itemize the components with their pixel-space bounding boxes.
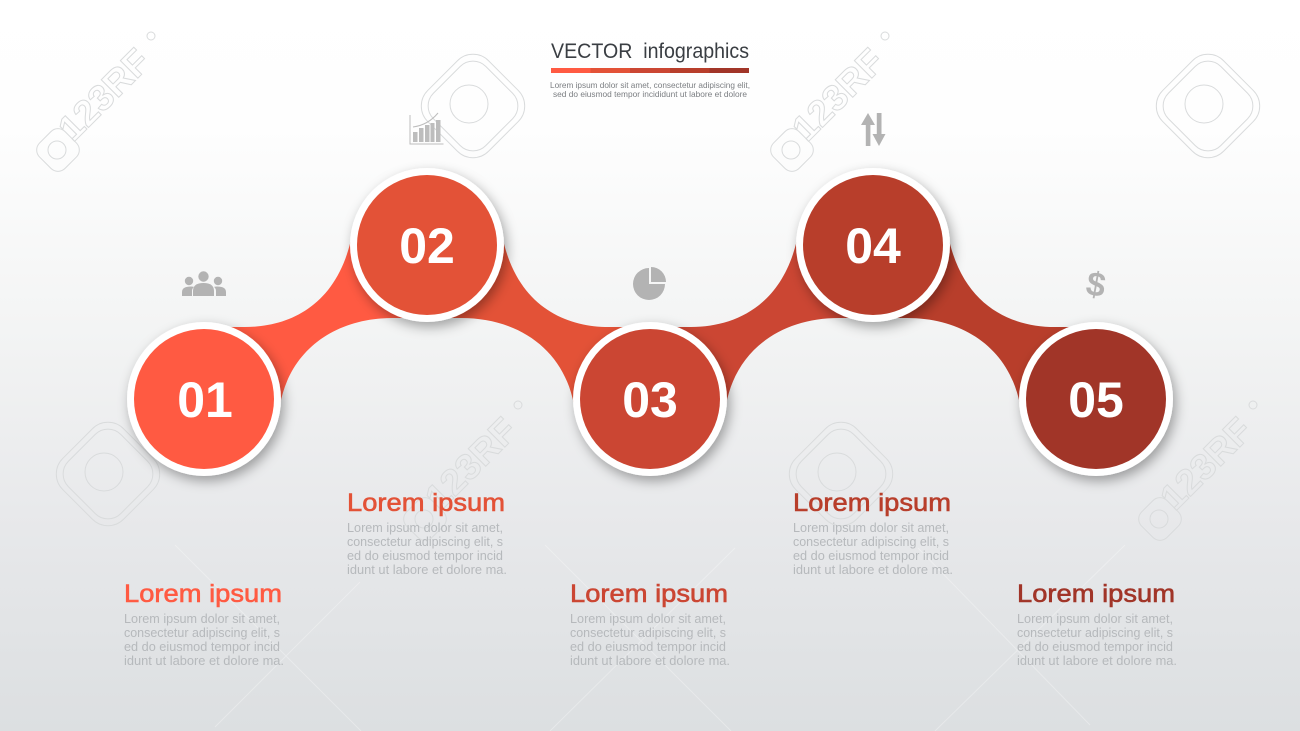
title description: Lorem ipsum dolor sit amet, consectetur adipiscing elit, — [550, 80, 750, 90]
text block 03: Lorem ipsum — [570, 580, 728, 608]
text block 04: idunt ut labore et dolore ma. — [793, 563, 953, 577]
text block 03: consectetur adipiscing elit, s — [570, 626, 726, 640]
text block 01 — [124, 580, 284, 668]
text block 02: idunt ut labore et dolore ma. — [347, 563, 507, 577]
text block 04: ed do eiusmod tempor incid — [793, 549, 949, 563]
ribbon segment 1 to 2 — [204, 235, 427, 405]
text block 01: ed do eiusmod tempor incid — [124, 640, 280, 654]
step 01 circle: 01 — [177, 372, 233, 428]
ribbon segment 2 to 3 — [427, 235, 650, 405]
text block 03 — [570, 580, 730, 668]
watermarks: 123RF — [50, 40, 158, 149]
text block 03: idunt ut labore et dolore ma. — [570, 654, 730, 668]
text block 05: idunt ut labore et dolore ma. — [1017, 654, 1177, 668]
text block 04 — [793, 489, 953, 577]
step 05 circle: 05 — [1068, 372, 1124, 428]
step 02 circle — [350, 168, 504, 322]
text block 01: consectetur adipiscing elit, s — [124, 626, 280, 640]
step 02 circle: 02 — [399, 218, 455, 274]
text block 05 — [1017, 580, 1177, 668]
text block 05: Lorem ipsum — [1017, 580, 1175, 608]
step 03 circle: 03 — [622, 372, 678, 428]
text block 03: ed do eiusmod tempor incid — [570, 640, 726, 654]
step 04 circle — [796, 168, 950, 322]
title gradient bar — [551, 68, 749, 73]
text block 03: Lorem ipsum dolor sit amet, — [570, 612, 726, 626]
title description — [550, 80, 750, 99]
icon: dollar: $ — [1083, 265, 1109, 305]
ribbon segment 3 to 4 — [650, 235, 873, 405]
icon: bar chart — [410, 113, 444, 144]
title block — [550, 40, 750, 99]
text block 02 — [347, 489, 507, 577]
wave ribbon — [204, 235, 1096, 405]
text block 05: Lorem ipsum dolor sit amet, — [1017, 612, 1173, 626]
step 01 circle — [127, 322, 281, 476]
text block 04: consectetur adipiscing elit, s — [793, 535, 949, 549]
watermarks: 123RF — [417, 409, 525, 518]
icon: pie chart — [633, 267, 666, 300]
watermarks: 123RF — [784, 40, 892, 149]
text block 01: Lorem ipsum dolor sit amet, — [124, 612, 280, 626]
icon: up and down arrows — [861, 113, 886, 146]
text block 02: consectetur adipiscing elit, s — [347, 535, 503, 549]
text block 02: ed do eiusmod tempor incid — [347, 549, 503, 563]
title description: sed do eiusmod tempor incididunt ut labore et dolore — [553, 89, 747, 99]
text block 01: idunt ut labore et dolore ma. — [124, 654, 284, 668]
text block 02: Lorem ipsum dolor sit amet, — [347, 521, 503, 535]
step 05 circle — [1019, 322, 1173, 476]
ribbon segment 4 to 5 — [873, 235, 1096, 405]
icon: people — [182, 271, 226, 296]
text block 01: Lorem ipsum — [124, 580, 282, 608]
text block 05: ed do eiusmod tempor incid — [1017, 640, 1173, 654]
watermarks: 123RF — [1152, 409, 1260, 518]
text block 04: Lorem ipsum — [793, 489, 951, 517]
text block 05: consectetur adipiscing elit, s — [1017, 626, 1173, 640]
step 04 circle: 04 — [845, 218, 901, 274]
text block 02: Lorem ipsum — [347, 489, 505, 517]
title: VECTOR infographics — [551, 40, 749, 63]
step 03 circle — [573, 322, 727, 476]
text block 04: Lorem ipsum dolor sit amet, — [793, 521, 949, 535]
